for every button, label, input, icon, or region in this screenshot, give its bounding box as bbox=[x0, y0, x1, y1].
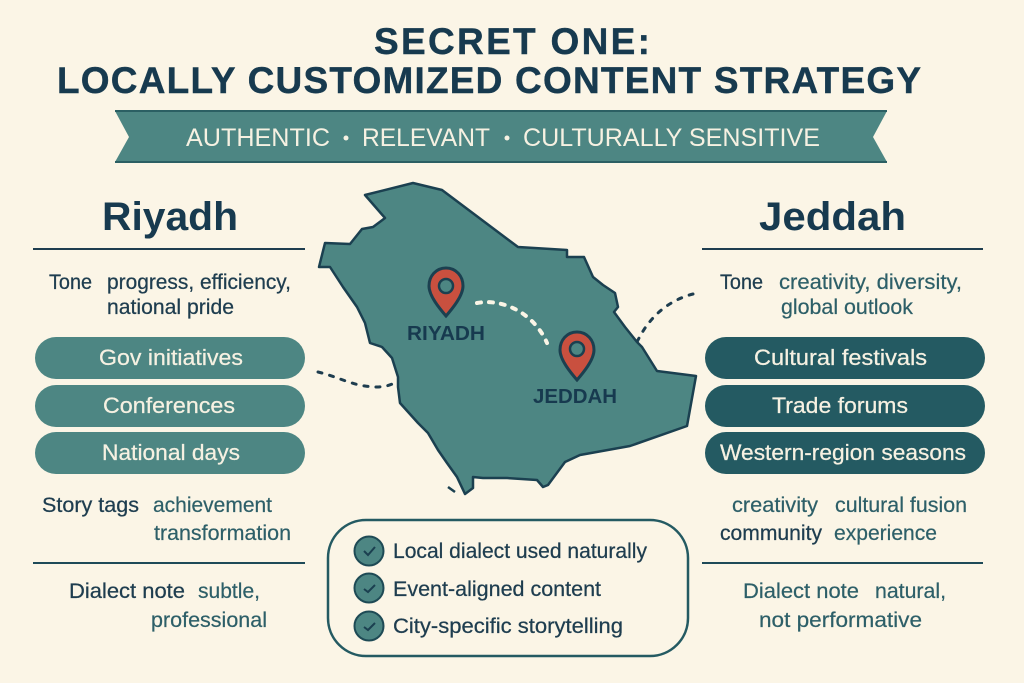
heading: Jeddah: Jeddah bbox=[759, 195, 906, 239]
item: Event-aligned bbox=[354, 574, 601, 602]
item: Local dialect bbox=[354, 536, 647, 566]
story tags: creativity bbox=[732, 494, 819, 517]
tone text: Tone bbox=[49, 271, 92, 294]
item: City-specific: City-specific storytelling bbox=[393, 615, 623, 638]
ribbon banner: RELEVANT bbox=[362, 124, 490, 152]
heading: Riyadh: Riyadh bbox=[102, 195, 238, 239]
tone text bbox=[720, 271, 962, 319]
pill: Conferences bbox=[35, 385, 305, 427]
title: LOCALLY CUSTOMIZED CONTENT STRATEGY bbox=[57, 60, 921, 101]
dialect note: natural, bbox=[875, 580, 946, 603]
map of Saudi Arabia bbox=[319, 183, 696, 494]
pill: Cultural festivals bbox=[705, 337, 985, 379]
item: Event-aligned: Event-aligned content bbox=[393, 578, 601, 601]
ribbon banner: AUTHENTIC bbox=[186, 124, 330, 152]
pill: Gov initiatives bbox=[35, 337, 305, 379]
title bbox=[57, 21, 921, 101]
checklist panel bbox=[328, 520, 688, 656]
pill: National days: National days bbox=[102, 440, 240, 465]
tone text: Tone bbox=[720, 271, 763, 294]
story tags: achievement bbox=[153, 494, 272, 517]
pin: Riyadh bbox=[429, 268, 463, 316]
pill: Cultural festivals: Cultural festivals bbox=[754, 345, 927, 370]
pill: Trade forums bbox=[705, 385, 985, 427]
label: RIYADH: RIYADH bbox=[407, 323, 485, 345]
pill: Western-region seasons: Western-region seasons bbox=[720, 440, 966, 465]
tone text bbox=[49, 271, 291, 319]
story tags: Story tags bbox=[42, 494, 139, 517]
ribbon banner bbox=[115, 110, 887, 163]
pill: National days bbox=[35, 432, 305, 474]
title: SECRET ONE: bbox=[374, 21, 650, 62]
pill: Trade forums: Trade forums bbox=[772, 393, 908, 418]
tone text: progress, efficiency, bbox=[107, 271, 291, 294]
dialect note: professional bbox=[151, 609, 267, 632]
dialect note: subtle, bbox=[198, 580, 260, 603]
pill: Western-region seasons bbox=[705, 432, 985, 474]
dialect note bbox=[743, 580, 946, 632]
pin: Jeddah bbox=[560, 332, 594, 380]
ribbon banner: CULTURALLY SENSITIVE bbox=[523, 124, 820, 152]
tone text: national pride bbox=[107, 296, 234, 319]
story tags bbox=[720, 494, 967, 545]
story tags: cultural fusion bbox=[835, 494, 967, 517]
item: Local dialect: Local dialect used naturally bbox=[393, 540, 647, 563]
connector: Jeddah panel to map bbox=[637, 294, 693, 342]
story tags: community bbox=[720, 522, 822, 545]
route between cities bbox=[477, 302, 547, 343]
tone text: creativity, diversity, bbox=[779, 271, 962, 294]
story tags: transformation bbox=[154, 522, 291, 545]
tone text: global outlook bbox=[781, 296, 913, 319]
dialect note: Dialect note bbox=[743, 580, 859, 603]
panel: Jeddah bbox=[702, 195, 985, 632]
connector: Riyadh panel to map bbox=[318, 372, 396, 387]
label: JEDDAH: JEDDAH bbox=[533, 386, 617, 408]
dialect note: Dialect note bbox=[69, 580, 185, 603]
pill: Conferences: Conferences bbox=[103, 393, 235, 418]
dialect note bbox=[69, 580, 267, 632]
dialect note: not performative bbox=[759, 609, 922, 632]
pill: Gov initiatives: Gov initiatives bbox=[99, 345, 243, 370]
story tags: experience bbox=[834, 522, 937, 545]
item: City-specific bbox=[354, 612, 623, 640]
story tags bbox=[42, 494, 291, 545]
panel: Riyadh bbox=[33, 195, 305, 632]
